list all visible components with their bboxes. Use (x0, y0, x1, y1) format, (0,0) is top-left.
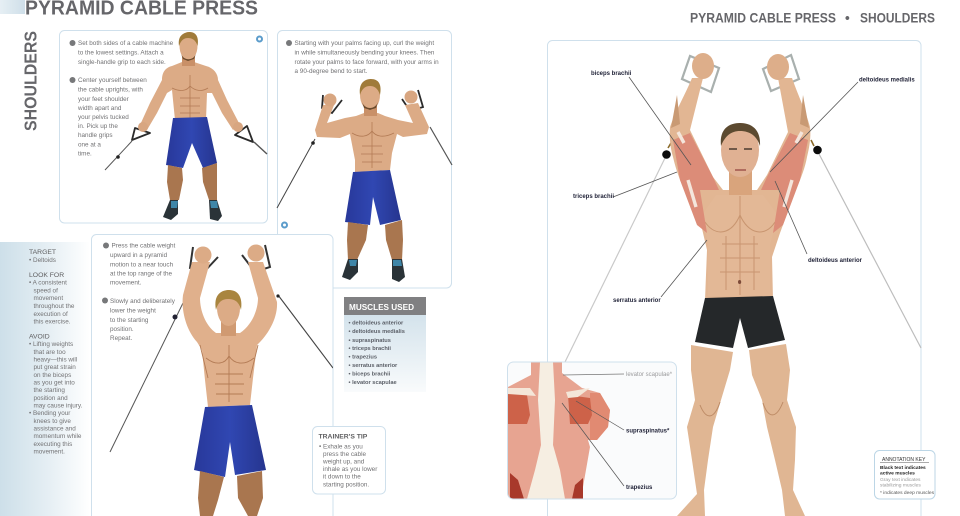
callout: trainer's tip: inhale as you lower (323, 466, 377, 473)
sidebar: target, look for, avoid: may cause injury. (34, 402, 83, 410)
sidebar: target, look for, avoid: movement (34, 295, 63, 302)
cables and handles (565, 55, 921, 362)
callout: trainer's tip: TRAINER'S TIP (318, 434, 368, 440)
label: serratus anterior (613, 240, 707, 304)
legend: annotation key: Black text indicates (880, 465, 926, 471)
sidebar: target, look for, avoid: TARGET (29, 249, 56, 256)
panel: step b (277, 30, 452, 288)
step 4 and 5 text: upward in a pyramid (110, 252, 168, 259)
sidebar: target, look for, avoid: as you get into (34, 380, 75, 386)
callout: trainer's tip: • Exhale as you (319, 444, 363, 450)
sidebar: target, look for, avoid: position and (34, 395, 68, 402)
sidebar: target, look for, avoid: on the biceps (34, 372, 71, 379)
section label: shoulders: SHOULDERS (20, 31, 40, 131)
step 1 and 2 text: your feet shoulder (78, 96, 129, 103)
label: deltoideus medialis: deltoideus medialis (859, 78, 915, 84)
callout: trainer's tip (312, 426, 386, 494)
step 4 and 5 text: lower the weight (110, 308, 156, 314)
step 1 and 2 text: time. (78, 150, 92, 158)
step 3 text: in while simultaneously bending your knees. Then (294, 50, 435, 56)
callout: trainer's tip: press the cable (323, 451, 366, 458)
running header: SHOULDERS (860, 10, 935, 26)
sidebar: target, look for, avoid: this exercise. (34, 318, 71, 326)
label: levator scapulae (563, 372, 673, 378)
sidebar: target, look for, avoid: speed of (34, 288, 58, 294)
label: levator scapulae: levator scapulae* (626, 372, 673, 378)
sidebar: target, look for, avoid: LOOK FOR (29, 272, 64, 279)
callout: trainer's tip: weight up, and (322, 458, 365, 466)
sidebar: target, look for, avoid: assistance and (34, 426, 76, 432)
step 1 and 2 text: your pelvis tucked (78, 114, 129, 121)
step 4 and 5 text (102, 242, 176, 342)
step 1 and 2 text: width apart and (77, 105, 122, 112)
step 4 and 5 text: Slowly and deliberately (110, 298, 176, 305)
running header: PYRAMID CABLE PRESS (690, 10, 836, 26)
figure: curled start (277, 79, 452, 282)
legend: annotation key: active muscles (880, 470, 915, 476)
panel: muscles used: • deltoideus anterior (348, 320, 404, 326)
panel: muscles used: • deltoideus medialis (348, 329, 405, 335)
sidebar: target, look for, avoid: execution of (34, 311, 68, 318)
label: deltoideus anterior (775, 181, 863, 264)
sidebar: target, look for, avoid: heavy—this will (34, 356, 77, 364)
running header (690, 10, 935, 26)
step 1 and 2 text: Center yourself between (78, 77, 147, 84)
sidebar: target, look for, avoid: executing this (34, 441, 72, 448)
badge a (256, 36, 263, 42)
step 1 and 2 text: in. Pick up the (78, 123, 118, 130)
sidebar: target, look for, avoid: put great strain (34, 364, 76, 371)
legend: annotation key: Gray text indicates (880, 477, 921, 483)
label: triceps brachii (573, 172, 677, 200)
panel: muscles used: • trapezius (348, 354, 377, 360)
label: supraspinatus (576, 401, 670, 434)
label: trapezius (562, 403, 653, 491)
step 4 and 5 text: Press the cable weight (112, 242, 176, 250)
panel: muscles used: • levator scapulae (348, 380, 397, 386)
panel: muscles used (344, 297, 426, 392)
sidebar: target, look for, avoid: AVOID (29, 334, 50, 340)
step 1 and 2 text: handle grips (78, 132, 113, 139)
sidebar: target, look for, avoid: throughout the (34, 303, 75, 310)
step 4 and 5 text: position. (110, 326, 134, 333)
label: deltoideus anterior: deltoideus anterior (808, 258, 863, 264)
step 1 and 2 text (70, 40, 174, 158)
panel: step c (92, 234, 333, 516)
step 1 and 2 text: Set both sides of a cable machine (78, 40, 174, 47)
sidebar: target, look for, avoid: • A consistent (29, 280, 67, 286)
label: triceps brachii: triceps brachii (573, 194, 614, 200)
figure: starting stance (105, 32, 267, 221)
label: supraspinatus: supraspinatus* (626, 428, 670, 434)
sidebar: target, look for, avoid: momentum while (34, 433, 82, 440)
label: trapezius: trapezius (626, 485, 653, 491)
panel: anatomy (548, 40, 921, 516)
panel: muscles used: • biceps brachii (348, 372, 391, 378)
label: deltoideus medialis (770, 78, 915, 172)
running header: • (845, 10, 850, 26)
step 3 text (286, 40, 439, 75)
step 3 text: Starting with your palms facing up, curl the weight (294, 40, 434, 47)
step 4 and 5 text: to the starting (110, 317, 149, 324)
panel: step a (60, 30, 268, 223)
step 1 and 2 text: single-handle grip to each side. (78, 59, 166, 66)
label: serratus anterior: serratus anterior (613, 298, 661, 304)
callout: trainer's tip: it down to the (323, 474, 361, 480)
sidebar: target, look for, avoid: that are too (34, 349, 66, 356)
label: biceps brachii (591, 71, 691, 165)
sidebar: target, look for, avoid (0, 242, 90, 516)
legend: annotation key: * indicates deep muscles (880, 490, 935, 496)
step 3 text: a 90-degree bend to start. (294, 68, 368, 75)
step 4 and 5 text: movement. (110, 280, 142, 286)
sidebar: target, look for, avoid: • Lifting weights (29, 341, 73, 348)
panel: muscles used: MUSCLES USED (349, 303, 414, 312)
step 1 and 2 text: one at a (78, 142, 101, 148)
inset: back muscles (508, 362, 676, 499)
badge b (281, 222, 288, 228)
panel: muscles used: • triceps brachii (348, 346, 391, 352)
step 4 and 5 text: Repeat. (110, 335, 132, 342)
sidebar: target, look for, avoid: movement. (34, 448, 65, 456)
step 4 and 5 text: at the top range of the (110, 270, 173, 278)
sidebar: target, look for, avoid: • Bending your (29, 410, 70, 417)
step 4 and 5 text: motion to a near touch (110, 262, 174, 268)
label: biceps brachii: biceps brachii (591, 71, 632, 77)
panel: muscles used: • supraspinatus (348, 338, 391, 344)
panel: muscles used: • serratus anterior (348, 363, 398, 369)
step 1 and 2 text: the cable uprights, with (78, 86, 143, 94)
sidebar: target, look for, avoid: the starting (34, 387, 65, 394)
sidebar: target, look for, avoid: knees to give (34, 418, 71, 425)
callout: trainer's tip: starting position. (323, 482, 369, 488)
step 1 and 2 text: to the lowest settings. Attach a (78, 50, 164, 56)
sidebar: target, look for, avoid: • Deltoids (29, 257, 56, 264)
legend: annotation key: ANNOTATION KEY (882, 457, 926, 463)
figure: press at the top (110, 244, 333, 516)
legend: annotation key (874, 450, 935, 499)
title bar tint (0, 0, 25, 14)
body (670, 53, 810, 516)
step 3 text: rotate your palms to face forward, with your arms in (294, 59, 439, 66)
legend: annotation key: stabilizing muscles (880, 482, 921, 488)
